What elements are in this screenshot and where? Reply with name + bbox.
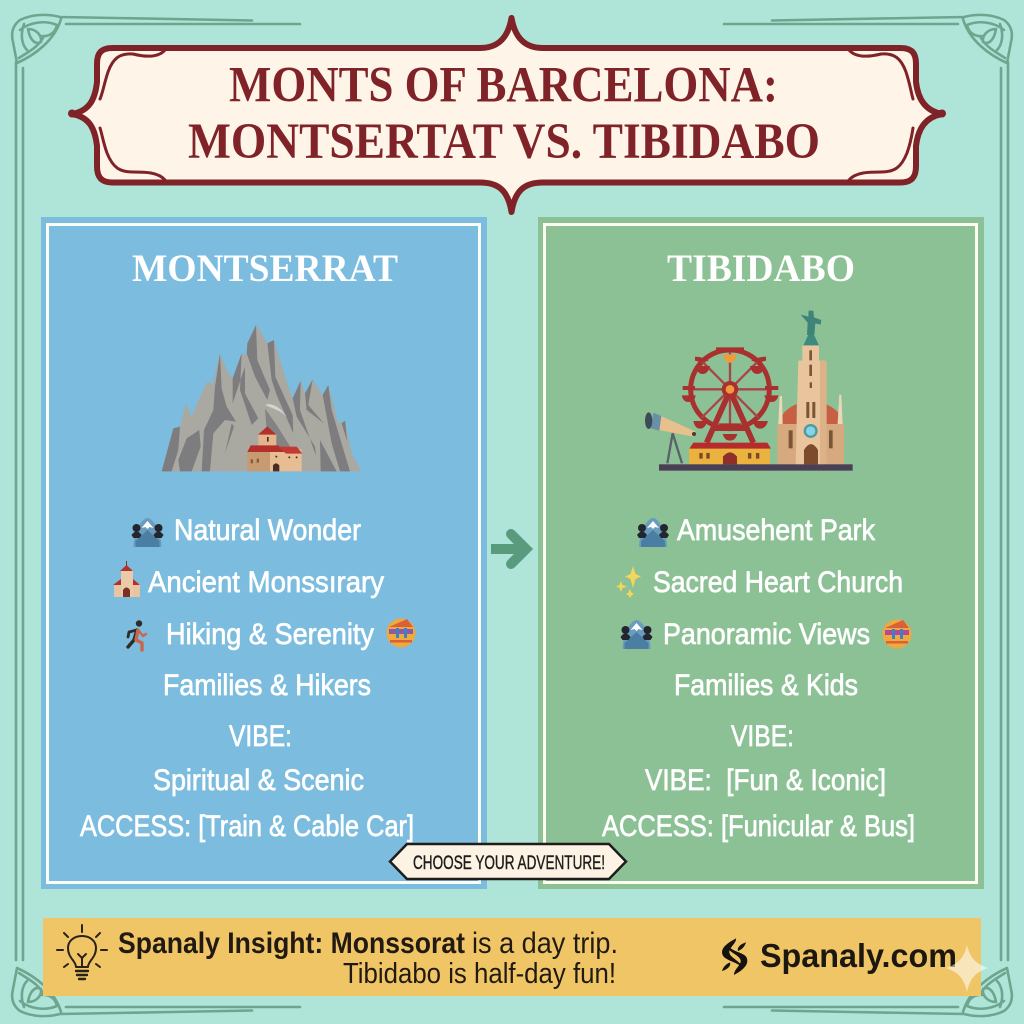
panel: Tibidabo xyxy=(538,217,984,889)
illustration: Tibidabo ferris wheel, telescope and church xyxy=(645,311,853,471)
decorative sparkle xyxy=(946,945,988,992)
insight text: is a day trip. xyxy=(472,927,618,960)
church xyxy=(777,311,844,464)
vibe value: Spiritual & Scenic xyxy=(153,764,364,797)
icon: small church xyxy=(113,561,140,597)
insight text xyxy=(118,927,618,990)
title text: MONTS OF BARCELONA: xyxy=(229,58,778,114)
icon: hiker xyxy=(128,620,146,650)
logo: Spanaly: Spanaly.com xyxy=(760,937,957,974)
icon: colourful badge xyxy=(386,618,416,648)
feature: Sacred Heart Church: Sacred Heart Church xyxy=(653,566,903,599)
ride building xyxy=(689,443,771,464)
feature: Ancient Monastery: Ancient Monssırary xyxy=(148,566,384,599)
icon: light bulb xyxy=(57,925,107,979)
monastery xyxy=(247,426,302,471)
callout: choose your adventure: CHOOSE YOUR ADVENTURE! xyxy=(413,853,605,874)
vibe label: VIBE: xyxy=(229,720,292,753)
icon: mountain xyxy=(132,518,164,547)
feature: Natural Wonder: Natural Wonder xyxy=(174,514,361,547)
insight text: Tibidabo is half-day fun! xyxy=(343,958,616,990)
feature: Panoramic Views: Panoramic Views xyxy=(663,618,870,651)
arrow between panels xyxy=(491,534,526,564)
title text: MONTSERTAT VS. TIBIDABO xyxy=(188,114,820,170)
vibe label: VIBE: xyxy=(731,720,794,753)
vibe value: VIBE: [Fun & Iconic] xyxy=(645,764,886,797)
ferris wheel xyxy=(682,347,779,443)
icon: sparkles xyxy=(616,566,641,598)
telescope xyxy=(645,412,696,463)
feature: Amusement Park: Amusehent Park xyxy=(677,514,876,547)
icon: mountain xyxy=(637,518,669,547)
illustration: Montserrat mountain and monastery xyxy=(162,325,362,471)
icon: mountain xyxy=(620,620,652,649)
title banner xyxy=(68,18,946,212)
access: ACCESS: [Funicular & Bus] xyxy=(602,810,915,843)
access: ACCESS: [Train & Cable Car] xyxy=(80,810,414,843)
callout: choose your adventure xyxy=(390,844,626,879)
feature: audience: Families & Kids xyxy=(674,669,858,702)
heading: Tibidabo: TIBIDABO xyxy=(667,247,855,290)
insight text: Spanaly Insight: Monssorat xyxy=(118,927,465,960)
feature: audience: Families & Hikers xyxy=(163,669,371,702)
feature: Hiking and Serenity: Hiking & Serenity xyxy=(166,618,374,651)
title text xyxy=(188,58,820,170)
heading: Montserrat: MONTSERRAT xyxy=(132,247,398,290)
insight bar xyxy=(43,918,988,996)
panel: Montserrat xyxy=(41,217,487,889)
icon: colourful badge xyxy=(882,620,912,648)
